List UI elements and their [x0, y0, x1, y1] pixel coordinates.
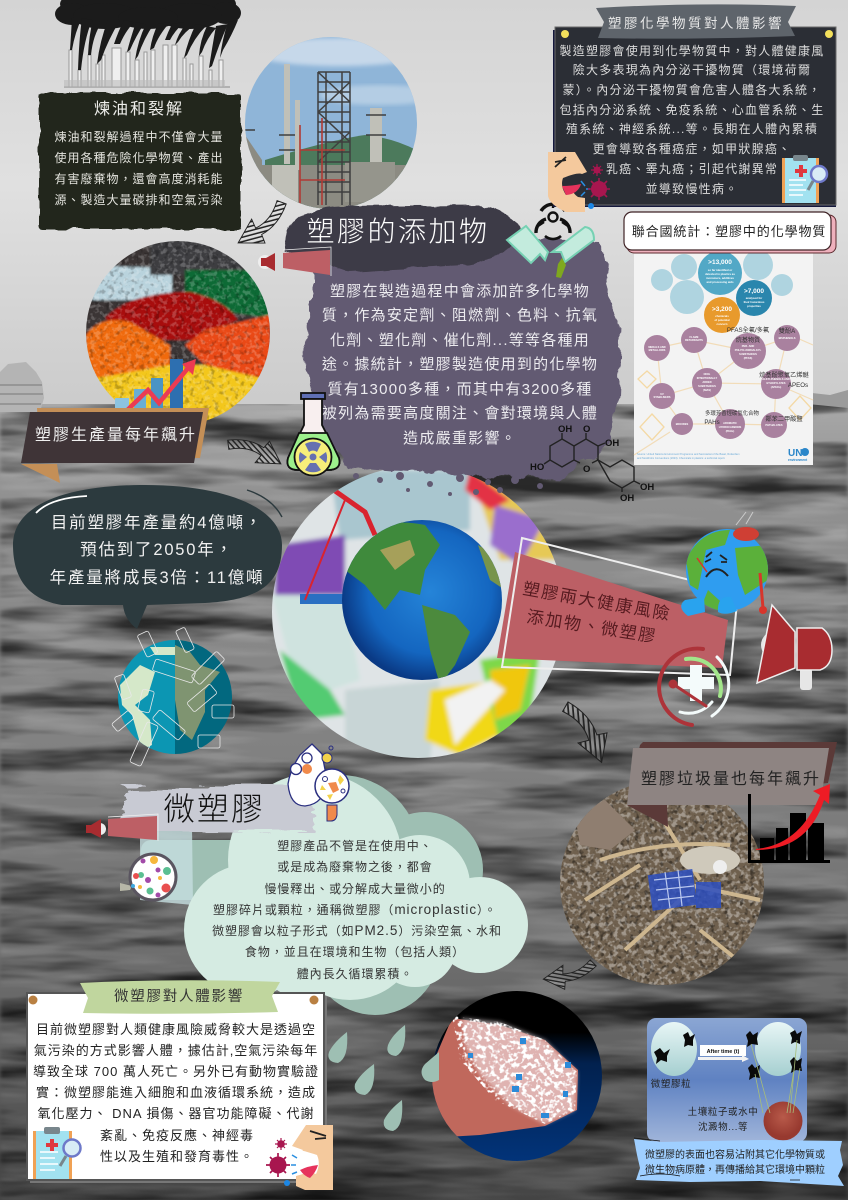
chart: UN plastic chemicals infographic: >7,000 [744, 288, 764, 295]
chart: UN plastic chemicals infographic: (APEOs) [771, 385, 781, 389]
chart: UN plastic chemicals infographic: FLAME [690, 335, 699, 339]
cloud: microplastic explanation: 食物，並且在環境和生物（包括人類） [245, 944, 465, 959]
icon: earth with plastic bottles [111, 627, 234, 767]
diagram: pollutant adsorption: 沈澱物...等 [698, 1121, 748, 1133]
ribbon: 塑膠生產量每年飆升: 塑膠生產量每年飆升 [35, 426, 197, 444]
icon: medical clipboard top [782, 155, 827, 203]
ribbon: 塑膠垃圾量也每年飆升 [627, 742, 837, 827]
heading: 塑膠的添加物 [284, 205, 520, 272]
chart: UN plastic chemicals infographic: (PFAS) [744, 356, 752, 360]
icon: virus bottom [266, 1138, 290, 1186]
chart: UN plastic chemicals infographic: >3,200 [712, 306, 732, 313]
heading: 塑膠的添加物: 塑膠的添加物 [306, 216, 490, 247]
icon: broken test tube [507, 226, 594, 278]
icon: coughing face top [548, 152, 590, 212]
icon: quercetin molecule: OH [640, 482, 654, 493]
icon: big megaphone [757, 605, 832, 690]
photo: plastic trash [560, 780, 764, 986]
chart: UN plastic chemicals infographic: Source: United Nations Environment Programme and Secretariat of the Basel, Rotterdam [637, 452, 740, 456]
cloud: microplastic explanation: 或是成為廢棄物之後，都會 [277, 859, 433, 874]
panel: 微塑膠對人體影響: 實：微塑膠能進入細胞和血液循環系統，造成 [36, 1085, 316, 1100]
panel: 塑膠化學物質對人體影響: 更會導致各種癌症，如甲狀腺癌、 [593, 141, 791, 156]
ribbon: 塑膠垃圾量也每年飆升: 塑膠垃圾量也每年飆升 [641, 770, 821, 788]
icon: quercetin molecule: OH [558, 424, 572, 435]
chart: UN plastic chemicals infographic: NON- [704, 372, 710, 376]
chart: UN plastic chemicals infographic [634, 248, 813, 465]
cloud: microplastic explanation: 微塑膠會以粒子形式（如PM2.5）污染空氣、水和 [212, 923, 502, 938]
panel: 塑膠的添加物 body text: 途。據統計，塑膠製造使用到的化學物 [322, 355, 598, 373]
chart: UN plastic chemicals infographic: METALLOIDS [649, 348, 666, 352]
chart: UN plastic chemicals infographic: UN [788, 448, 802, 459]
ribbon: panel heading: 塑膠化學物質對人體影響 [608, 15, 784, 31]
panel: 塑膠的添加物 body text: 被列為需要高度關注、會對環境與人體 [322, 404, 598, 422]
cloud front layer [184, 773, 528, 1000]
cloud: microplastic explanation: 塑膠產品不管是在使用中、 [277, 838, 433, 853]
icon: rising bar chart [115, 359, 196, 421]
chart: UN plastic chemicals infographic: PER- AND [742, 344, 754, 348]
chart: UN plastic chemicals infographic: ADDED [702, 380, 712, 384]
chart: UN plastic chemicals infographic: STABILISERS [654, 395, 671, 399]
chart: UN plastic chemicals infographic: chemicals [715, 314, 729, 318]
icon: medical clipboard bottom [33, 1127, 80, 1179]
chart: UN plastic chemicals infographic: monomers, additives [706, 276, 734, 280]
panel: 微塑膠對人體影響 [27, 980, 327, 1183]
chart: UN plastic chemicals infographic: SUBSTANCES [739, 352, 757, 356]
cloud: microplastic explanation: 慢慢釋出、或分解成大量微小的 [264, 881, 446, 896]
label: 聯合國統計: 聯合國統計：塑膠中的化學物質 [632, 224, 826, 239]
chart: UN plastic chemicals infographic: APEOs [788, 382, 808, 389]
panel: 塑膠兩大健康風險 [497, 538, 738, 675]
panel: 煉油和裂解 [39, 93, 241, 229]
icon: flask-shaped molecule with magnifier [288, 744, 349, 821]
cloud: microplastic explanation [140, 773, 528, 1015]
heading: 微塑膠: 微塑膠 [163, 791, 265, 827]
arrow: refinery to pellets [236, 193, 290, 256]
arrow: pellets to flask [225, 435, 284, 466]
callout: speech bubble 年產量: 目前塑膠年產量約4億噸， [51, 513, 263, 532]
photo: plastic pellets [84, 239, 272, 427]
panel: 塑膠化學物質對人體影響: 險大多表現為內分泌干擾物質（環境荷爾 [573, 62, 811, 77]
icon: trash bar chart with red arrow [748, 784, 830, 863]
diagram: pollutant adsorption [647, 1018, 807, 1142]
arrow: trash to microplastic [542, 951, 598, 996]
panel: 微塑膠對人體影響: 紊亂、免疫反應、神經毒 [100, 1128, 254, 1143]
ribbon: panel heading [80, 980, 280, 1014]
panel: 微塑膠對人體影響: 性以及生殖和發育毒性。 [100, 1149, 254, 1164]
icon: magnifier with particles [120, 854, 176, 900]
ribbon: panel heading: 微塑膠對人體影響 [114, 987, 244, 1005]
callout: adsorption caption [634, 1138, 844, 1186]
panel: 塑膠化學物質對人體影響: 蒙）。內分泌干擾物質會危害人體各大系統， [562, 82, 822, 97]
chart: UN plastic chemicals infographic: so far identified or [708, 268, 733, 272]
icon: quercetin molecule: HO [530, 462, 544, 473]
panel: 塑膠的添加物 body text: 造成嚴重影響。 [403, 429, 517, 447]
cloud: microplastic explanation: 塑膠碎片或顆粒，通稱微塑膠（microplastic）。 [213, 902, 497, 917]
icon: quercetin molecule: O [583, 464, 590, 475]
panel: 煉油和裂解: 煉油和裂解 [94, 100, 184, 118]
panel: 煉油和裂解: 有害廢棄物，還會高度消耗能 [54, 171, 224, 186]
callout: speech bubble 年產量 [13, 485, 282, 629]
chart: UN plastic chemicals infographic: BIOCIDES [676, 422, 689, 426]
diagram: pollutant adsorption: After time (t) [707, 1049, 740, 1055]
chart: UN plastic chemicals infographic: POLYFLUOROALKYL [735, 348, 762, 352]
callout: speech bubble 年產量: 預估到了2050年， [80, 540, 234, 559]
panel: 塑膠化學物質對人體影響 [553, 4, 836, 207]
chart: UN plastic chemicals infographic: HYDROCARBONS [719, 425, 742, 429]
chart: UN plastic chemicals infographic: analysed for [746, 296, 763, 300]
panel: 煉油和裂解: 使用各種危險化學物質、產出 [54, 150, 224, 165]
icon: virus top [588, 164, 610, 209]
callout: adsorption caption: 微塑膠的表面也容易沾附其它化學物質或 [645, 1148, 825, 1161]
chart: UN plastic chemicals infographic: ALKYLPHENOLS AND [762, 377, 790, 381]
icon: quercetin molecule: O [583, 424, 590, 435]
chart: UN plastic chemicals infographic: 烷基物質 [736, 336, 760, 344]
panel: 微塑膠對人體影響: 目前微塑膠對人類健康風險威脅較大是透過空 [36, 1022, 316, 1037]
ribbon: panel heading [596, 4, 796, 39]
panel: 塑膠的添加物 body text: 質有13000多種，而其中有3200多種 [327, 380, 593, 398]
chart: UN plastic chemicals infographic: 雙酚A [779, 327, 796, 335]
photo: plastic waste around the globe [272, 470, 556, 758]
chart: UN plastic chemicals infographic: 烷基酚聚氧乙烯醚 [759, 371, 809, 379]
chart: UN plastic chemicals infographic: and processing aids [706, 280, 734, 284]
panel: 塑膠化學物質對人體影響: 殖系統、神經系統...等。長期在人體內累積 [566, 121, 818, 136]
icon: megaphone banner microplastic [86, 814, 158, 841]
icon: megaphone banner top [258, 247, 331, 276]
ribbon: 塑膠生產量每年飆升 [21, 408, 209, 483]
photo: oil refinery [245, 37, 417, 208]
icon: quercetin molecule: OH [605, 438, 619, 449]
chart: UN plastic chemicals infographic: INTENTIONALLY [697, 376, 718, 380]
chart: UN plastic chemicals infographic: (NIAS) [703, 388, 711, 392]
panel: 煉油和裂解: 源、製造大量碳排和空氣污染 [54, 192, 224, 207]
panel: 煉油和裂解: 煉油和裂解過程中不僅會大量 [54, 129, 224, 144]
panel: 塑膠化學物質對人體影響: 製造塑膠會使用到化學物質中，對人體健康風 [559, 43, 825, 58]
panel: 塑膠化學物質對人體影響: 包括內分泌系統、免疫系統、心血管系統、生 [559, 102, 825, 117]
panel: 塑膠的添加物 body text: 塑膠在製造過程中會添加許多化學物 [330, 282, 590, 300]
chart: UN plastic chemicals infographic: RETARDANTS [685, 338, 703, 342]
chart: UN plastic chemicals infographic: 多環芳香烴碳氫化合物 [705, 409, 760, 417]
chart: UN plastic chemicals infographic: properties [747, 304, 761, 308]
panel: 微塑膠對人體影響: 氣污染的方式影響人體，據估計,空氣污染每年 [34, 1043, 318, 1058]
chart: UN plastic chemicals infographic: PFAS全氟/多氟 [727, 326, 769, 334]
chart: UN plastic chemicals infographic: their hazardous [744, 300, 765, 304]
cloud: microplastic explanation: 體內長久循環累積。 [297, 966, 413, 981]
icon: smokestacks with smoke [55, 0, 241, 87]
diagram: pollutant adsorption: 土壤粒子或水中 [688, 1106, 758, 1118]
callout: speech bubble 年產量: 年產量將成長3倍：11億噸 [50, 568, 264, 587]
chart: UN plastic chemicals infographic: and Stockholm Conventions (2023). Chemicals in plastics: a technical report. [637, 456, 726, 460]
chart: UN plastic chemicals infographic: UV [660, 392, 664, 396]
photo: microplastics on a finger [430, 991, 604, 1163]
icon: rain drops [328, 1025, 439, 1131]
icon: coughing face bottom [291, 1125, 333, 1190]
icon: flask with radiation symbol [287, 393, 340, 476]
arrow: center to trash [553, 698, 619, 764]
chart: UN plastic chemicals infographic: PAHs [704, 419, 720, 426]
panel: 塑膠的添加物 body text: 質，作為安定劑、阻燃劑、色料、抗氧 [322, 306, 598, 324]
chart: UN plastic chemicals infographic: BISPHENOLS [779, 336, 796, 340]
diagram: pollutant adsorption: 微塑膠粒 [651, 1078, 691, 1090]
icon: quercetin molecule: OH [620, 493, 634, 504]
panel: 塑膠兩大健康風險: 添加物、微塑膠 [525, 607, 658, 647]
chart: UN plastic chemicals infographic: (PAHs) [726, 429, 734, 433]
panel: 塑膠兩大健康風險: 塑膠兩大健康風險 [521, 579, 673, 624]
chart: UN plastic chemicals infographic: AROMATIC [723, 421, 737, 425]
icon: biohazard [536, 201, 570, 239]
panel: 塑膠的添加物 body text: 化劑、塑化劑、催化劑...等等各種用 [330, 331, 590, 349]
chart: UN plastic chemicals infographic: ETHOXYLATES [767, 381, 786, 385]
icon: sad earth with thermometer [681, 512, 768, 616]
chart: UN plastic chemicals infographic: 鄰苯二甲酸鹽 [765, 415, 803, 423]
chart: UN plastic chemicals infographic: PHTHALATES [765, 423, 783, 427]
panel: 塑膠的添加物 body text [302, 232, 620, 496]
icon: quercetin molecule [530, 424, 654, 504]
icon: earth globe [342, 520, 505, 685]
chart: UN plastic chemicals infographic: SUBSTANCES [698, 384, 716, 388]
label: 聯合國統計 [624, 212, 836, 253]
panel: 塑膠化學物質對人體影響: 並導致慢性病。 [646, 181, 738, 196]
cloud back layer [141, 775, 483, 1015]
panel: 微塑膠對人體影響: 氧化壓力、 DNA 損傷、器官功能障礙、代謝 [38, 1106, 314, 1121]
callout: adsorption caption: 微生物病原體，再傳播給其它環境中顆粒 [645, 1163, 825, 1176]
heading: 微塑膠 [124, 786, 314, 832]
chart: UN plastic chemicals infographic: MEDALS AND [648, 345, 666, 349]
chart: UN plastic chemicals infographic: of potential [714, 318, 730, 322]
chart: UN plastic chemicals infographic: environment [788, 458, 808, 462]
panel: 微塑膠對人體影響: 導致全球 700 萬人死亡。另外已有動物實驗證 [33, 1064, 319, 1079]
chart: UN plastic chemicals infographic: detected in plastics as [705, 272, 735, 276]
icon: medical ring with thermometer [659, 649, 729, 725]
panel: 塑膠化學物質對人體影響: 乳癌、睪丸癌；引起代謝異常 [606, 161, 778, 176]
chart: UN plastic chemicals infographic: >13,000 [708, 259, 732, 266]
chart: UN plastic chemicals infographic: concern [717, 322, 728, 326]
